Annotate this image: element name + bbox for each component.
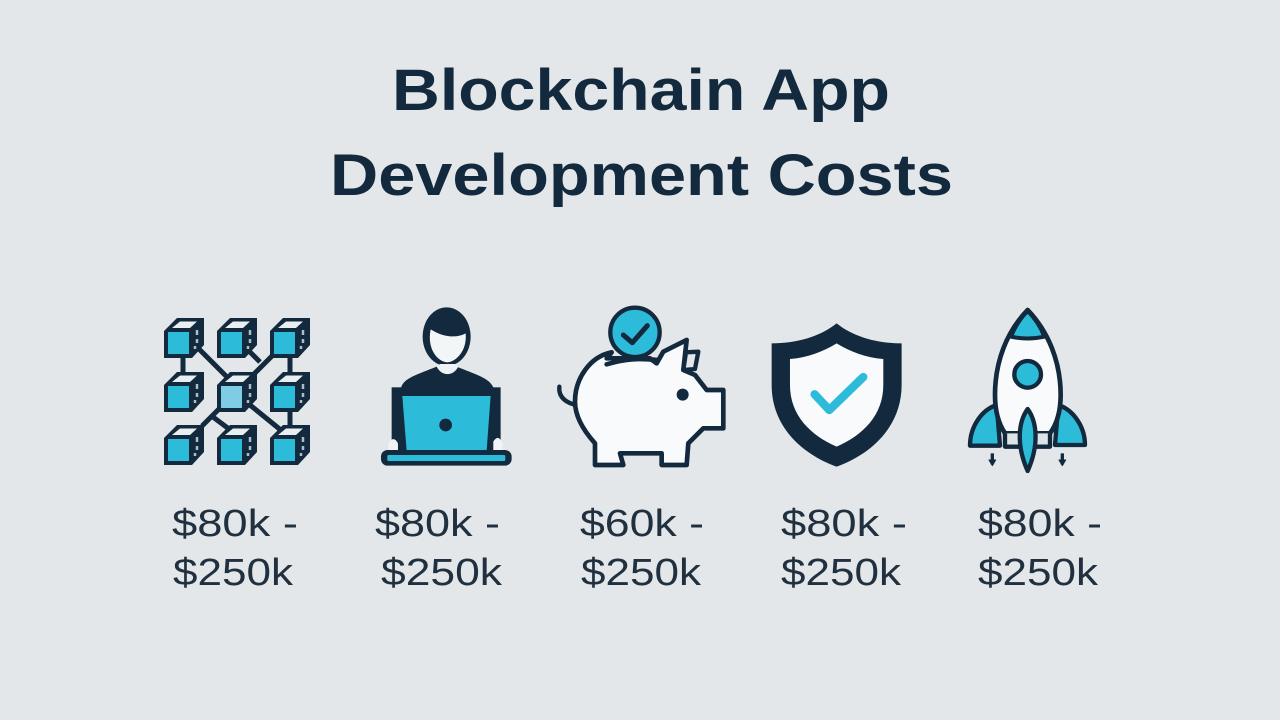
price: piggy bank [580,503,704,594]
price: shield [781,503,907,594]
price: developer [375,503,503,594]
price: shield: $250k [781,552,902,594]
title: Development Costs [330,143,953,208]
price: rocket [978,503,1102,594]
price: piggy bank: $250k [581,552,702,594]
icon: blockchain network [164,318,310,465]
price: blockchain network [172,503,298,594]
price: blockchain network: $80k - [172,503,298,545]
price: shield: $80k - [781,503,907,545]
icon: rocket [970,310,1085,471]
price: rocket: $250k [978,552,1099,594]
price: rocket: $80k - [978,503,1102,545]
icon: piggy bank with coin [559,308,723,465]
icon: developer at laptop [381,307,512,466]
icon: security shield [772,323,902,467]
price: developer: $80k - [375,503,500,545]
title [330,58,953,208]
title: Blockchain App [392,58,890,123]
price: piggy bank: $60k - [580,503,704,545]
price: developer: $250k [381,552,503,594]
price: blockchain network: $250k [173,552,294,594]
